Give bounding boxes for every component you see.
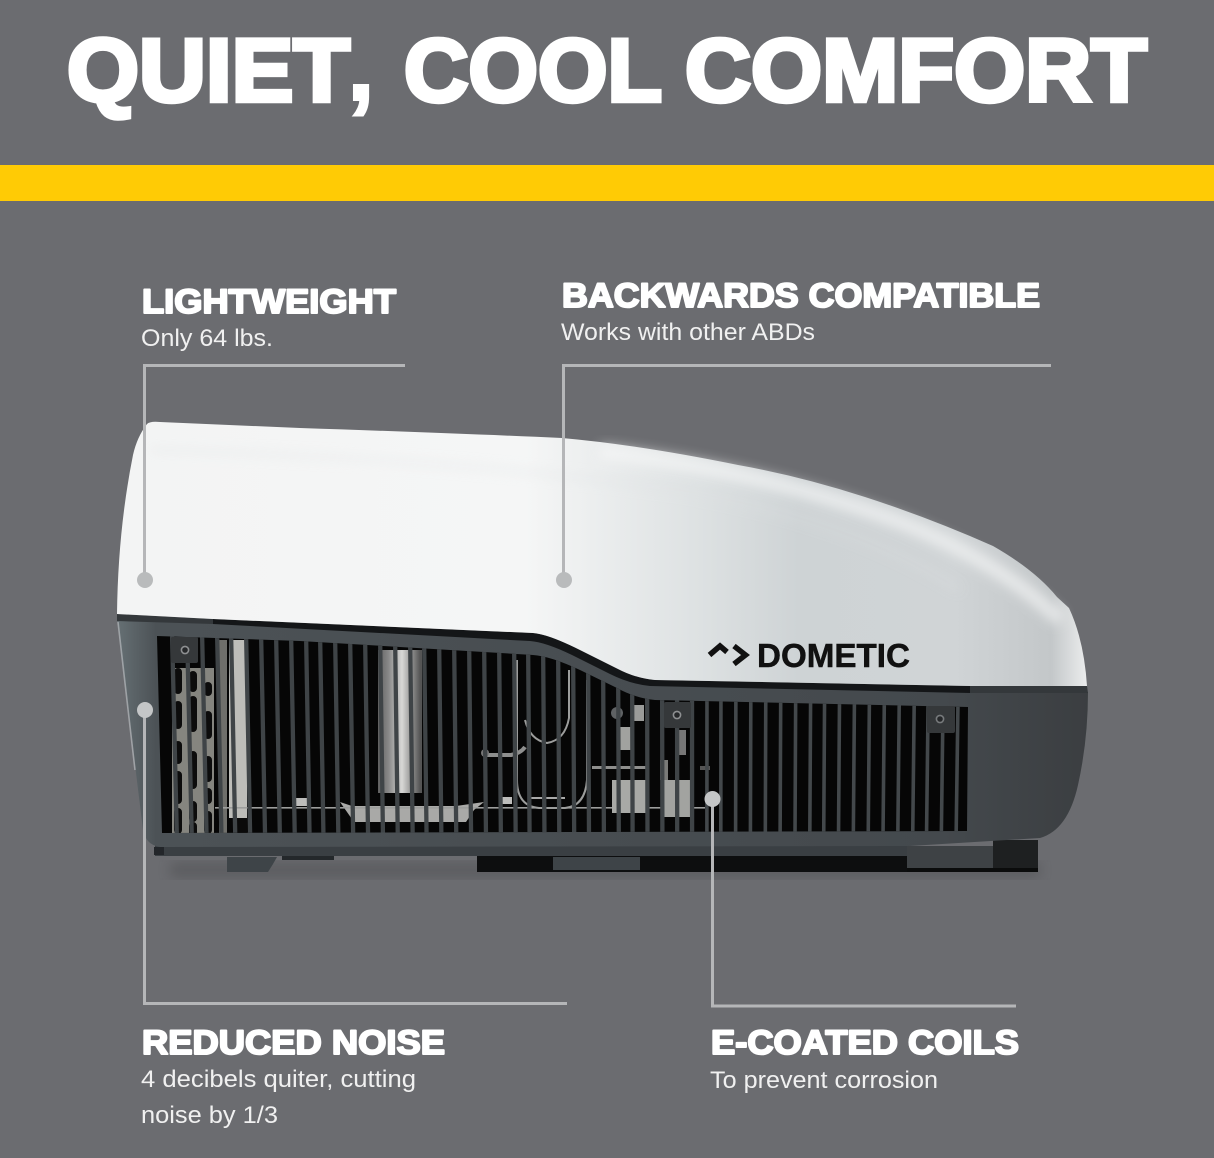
text block: reduced noise: 4 decibels quiter, cutting [141,1066,416,1093]
lower housing [117,618,1088,847]
black trim strip [213,619,970,693]
shell top highlight [600,452,1060,620]
title: COOL [404,20,662,120]
text block: backwards compatible: Works with other ABDs [561,319,815,346]
Dometic logo [710,637,910,674]
text block: reduced noise [141,1024,445,1129]
callout line: backwards compatible [556,366,1051,588]
text block: reduced noise: REDUCED NOISE [142,1024,445,1062]
housing left edge highlight [118,622,135,770]
title: COMFORT [685,20,1147,120]
title [67,10,1147,122]
text block: backwards compatible [561,277,1040,346]
text block: reduced noise: noise by 1/3 [141,1102,278,1129]
callout line: reduced noise [137,702,567,1004]
text block: lightweight [141,283,396,352]
shell crease shading [150,450,960,590]
vent slats [172,630,959,838]
text block: lightweight: LIGHTWEIGHT [142,283,396,321]
callout line: e-coated coils [704,791,1016,1006]
logo wordmark: DOMETIC [757,637,910,674]
title: , [347,10,375,122]
callout line: lightweight [137,366,405,588]
title: QUIET [67,20,350,120]
yellow band [0,165,1214,201]
product: air conditioner unit [117,422,1088,878]
white shell [117,422,1087,686]
vent opening [157,636,968,833]
grey trim [117,614,1088,693]
text block: e-coated coils [710,1024,1019,1094]
internal components [172,630,959,838]
mounting brackets [171,637,955,733]
feet and base rails [154,840,1038,872]
text block: backwards compatible: BACKWARDS COMPATIBLE [562,277,1040,315]
text block: lightweight: Only 64 lbs. [141,325,273,352]
text block: e-coated coils: To prevent corrosion [710,1067,938,1094]
logo mark [710,646,746,664]
text block: e-coated coils: E-COATED COILS [711,1024,1019,1062]
